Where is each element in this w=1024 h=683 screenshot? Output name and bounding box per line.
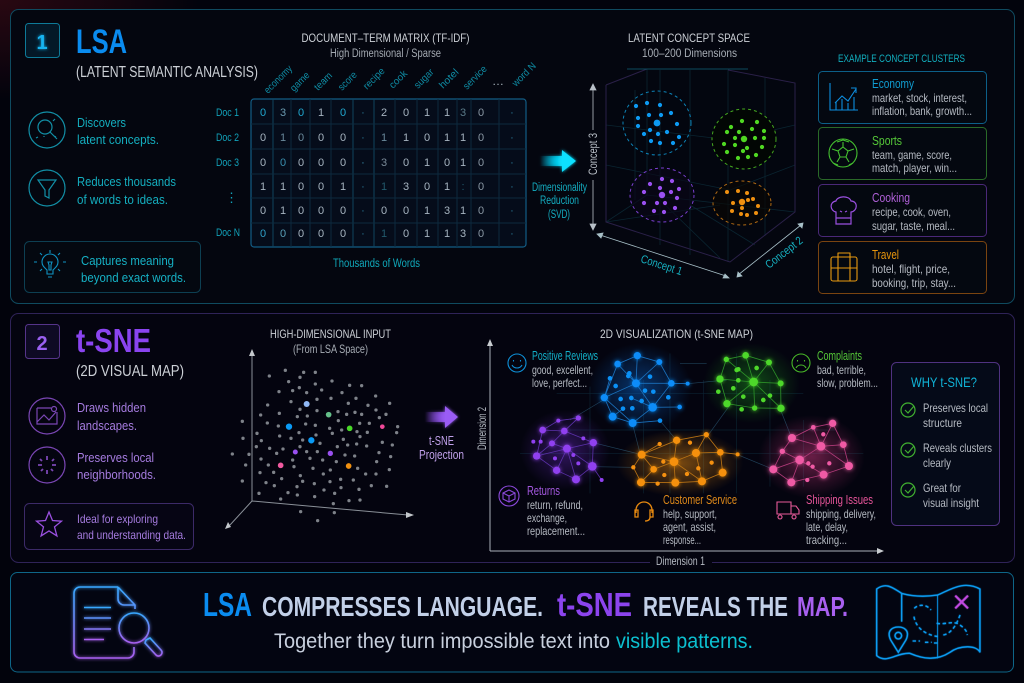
icon: soccer ball bbox=[829, 139, 857, 167]
panel: t-SNE bbox=[10, 314, 1014, 568]
arrow: dimensionality reduction bbox=[540, 150, 576, 172]
badge: number 1 bbox=[26, 24, 60, 58]
card: economy bbox=[818, 72, 986, 124]
matrix column labels: service bbox=[461, 64, 490, 92]
text: draws hidden landscapes bbox=[77, 400, 146, 433]
label: complaints: bad, terrible, bbox=[817, 363, 866, 377]
text: sports terms: team, game, score, bbox=[872, 148, 952, 162]
cluster: complaints nodes bbox=[703, 343, 800, 423]
cluster: positive reviews nodes bbox=[588, 343, 692, 433]
chart: document-term matrix: 0 0 000 · 1 0113 0 · bbox=[260, 228, 514, 240]
chart axes: Dimension 1 bbox=[656, 554, 705, 568]
label: shipping issues: shipping, delivery, bbox=[806, 507, 876, 521]
icon: suitcase bbox=[831, 253, 857, 281]
headline: MAP. bbox=[797, 591, 848, 622]
text: preserves local neighborhoods: Preserves local bbox=[77, 450, 154, 465]
text: ideal for exploring bbox=[77, 512, 186, 542]
icon: star bbox=[36, 512, 62, 536]
label: returns: replacement... bbox=[527, 524, 585, 538]
text: sports terms bbox=[872, 148, 957, 175]
text: captures meaning beyond exact words bbox=[81, 253, 186, 285]
label: returns: exchange, bbox=[527, 511, 567, 525]
text: sports terms: match, player, win... bbox=[872, 161, 957, 175]
label: complaints bbox=[792, 349, 878, 390]
chart: 3D latent concept space bbox=[586, 69, 806, 278]
label: customer service: response... bbox=[663, 533, 701, 547]
text: travel: Travel bbox=[872, 247, 899, 262]
matrix column labels: cook bbox=[387, 68, 411, 91]
text: reduces thousands of words: Reduces thousands bbox=[77, 174, 176, 189]
card: why t-SNE bbox=[892, 362, 1000, 526]
tagline: visible patterns. bbox=[616, 630, 753, 653]
matrix column labels: team bbox=[312, 70, 335, 93]
label: returns: Returns bbox=[527, 484, 560, 498]
heading: high-dimensional input: HIGH-DIMENSIONAL INPUT bbox=[270, 327, 392, 341]
card: sports bbox=[818, 128, 986, 180]
matrix column labels: economy bbox=[262, 64, 295, 96]
text: draws hidden landscapes: landscapes. bbox=[77, 418, 137, 433]
chart: document-term matrix: 0 3 0 1 0 · 2011 3 0 · bbox=[260, 107, 514, 119]
label: positive reviews: good, excellent, bbox=[532, 363, 593, 377]
checklist text: Reveals clusters bbox=[923, 441, 992, 455]
matrix column labels: game bbox=[288, 70, 313, 94]
matrix column labels: hotel bbox=[437, 67, 461, 91]
icon: funnel bbox=[29, 170, 65, 206]
icon: truck bbox=[777, 502, 799, 519]
text: reduces thousands of words: of words to ideas. bbox=[77, 192, 168, 207]
icon: chef hat bbox=[831, 197, 856, 224]
subheading: high dimensional sparse: High Dimensional / Sparse bbox=[330, 48, 441, 60]
label: positive reviews: Positive Reviews bbox=[532, 349, 598, 363]
panel: takeaway banner bbox=[10, 572, 1014, 672]
text: travel terms: hotel, flight, price, bbox=[872, 262, 950, 276]
text: cooking: Cooking bbox=[872, 190, 910, 205]
matrix row labels: Doc 3 bbox=[216, 157, 239, 169]
icon: magnifier bbox=[29, 112, 65, 148]
headline: REVEALS THE bbox=[643, 591, 788, 622]
cluster: customer service nodes bbox=[617, 430, 743, 497]
badge: number 2 bbox=[26, 324, 60, 358]
icon: treasure map bbox=[877, 585, 980, 659]
text: captures meaning beyond exact words: beyond exact words. bbox=[81, 270, 186, 285]
chart: t-SNE map bbox=[475, 339, 884, 568]
label: dimensionality reduction svd: Reduction bbox=[540, 195, 579, 207]
heading: t-SNE: t-SNE bbox=[76, 322, 151, 359]
cluster: green bbox=[712, 109, 776, 169]
text: discovers latent concepts: latent concepts. bbox=[77, 132, 159, 147]
heading: latent concept space: LATENT CONCEPT SPACE bbox=[628, 31, 750, 45]
headline: COMPRESSES LANGUAGE. bbox=[262, 591, 543, 622]
label: shipping issues: Shipping Issues bbox=[806, 493, 873, 507]
heading: example concept clusters: EXAMPLE CONCEPT CLUSTERS bbox=[838, 53, 965, 65]
label: thousands of words: Thousands of Words bbox=[333, 258, 420, 270]
matrix row labels: Doc 2 bbox=[216, 132, 239, 144]
text: economy terms: market, stock, interest, bbox=[872, 91, 967, 105]
text: cooking terms: recipe, cook, oven, bbox=[872, 205, 951, 219]
text: reduces thousands of words bbox=[77, 174, 176, 207]
label: dimensionality reduction svd: (SVD) bbox=[548, 209, 570, 221]
checklist text: structure bbox=[923, 416, 962, 430]
icon: frown bbox=[792, 354, 810, 372]
text: economy terms bbox=[872, 91, 972, 118]
badge: number 2: 2 bbox=[36, 333, 48, 355]
chart: 3D scatter bbox=[225, 349, 414, 529]
heading: LSA: LSA bbox=[76, 23, 127, 61]
checklist text: clearly bbox=[923, 456, 951, 470]
axis: concept 3 bbox=[586, 84, 600, 230]
label: shipping issues bbox=[777, 493, 876, 547]
subheading: 100-200 dimensions: 100–200 Dimensions bbox=[642, 48, 737, 60]
text: draws hidden landscapes: Draws hidden bbox=[77, 400, 146, 415]
text: travel terms bbox=[872, 262, 956, 290]
text: preserves local neighborhoods: neighborhoods. bbox=[77, 467, 156, 482]
label: dimensionality reduction svd: Dimensionality bbox=[532, 182, 587, 194]
label: shipping issues: late, delay, bbox=[806, 520, 848, 534]
text: ideal for exploring: Ideal for exploring bbox=[77, 512, 158, 526]
tagline: Together they turn impossible text into bbox=[274, 630, 610, 653]
label: customer service: Customer Service bbox=[663, 493, 737, 507]
chart: document-term matrix bbox=[251, 99, 526, 247]
headline: t-SNE bbox=[557, 586, 632, 623]
axis: concept 3: Concept 3 bbox=[588, 133, 600, 175]
matrix column labels: sugar bbox=[412, 67, 437, 91]
heading: document-term matrix: DOCUMENT–TERM MATRIX (TF-IDF) bbox=[302, 31, 470, 45]
checklist icons bbox=[901, 403, 915, 497]
cluster: shipping issues nodes bbox=[758, 415, 865, 498]
text: travel terms: booking, trip, stay... bbox=[872, 276, 956, 290]
text: cooking terms: sugar, taste, meal... bbox=[872, 219, 955, 233]
text: preserves local neighborhoods bbox=[77, 450, 156, 482]
checklist text: Preserves local bbox=[923, 401, 988, 415]
chart: document-term matrix: 0 0 000 · 3 0101 0 · bbox=[260, 157, 514, 169]
matrix row labels bbox=[216, 107, 240, 239]
cluster: blue bbox=[623, 91, 691, 155]
headline: LSA bbox=[203, 586, 252, 623]
label: complaints: slow, problem... bbox=[817, 376, 878, 390]
text: sports: Sports bbox=[872, 133, 902, 148]
icon: box bbox=[499, 486, 519, 506]
matrix column labels: recipe bbox=[361, 66, 388, 92]
label: customer service: agent, assist, bbox=[663, 520, 716, 534]
chart: document-term matrix: 0 1 0 00 · 1 1011 0 · bbox=[260, 132, 514, 144]
arrow: t-SNE projection bbox=[425, 406, 458, 428]
icon: smile bbox=[508, 354, 526, 372]
label: dimensionality reduction svd bbox=[532, 182, 587, 221]
label: customer service bbox=[635, 493, 737, 547]
label: complaints: Complaints bbox=[817, 349, 862, 363]
label: t-SNE projection: t-SNE bbox=[429, 434, 454, 448]
card: cooking bbox=[818, 184, 986, 236]
label: returns: return, refund, bbox=[527, 498, 583, 512]
label: t-SNE projection: Projection bbox=[419, 448, 464, 462]
text: economy terms: inflation, bank, growth... bbox=[872, 104, 972, 118]
callout: ideal for exploring bbox=[24, 504, 194, 550]
matrix column labels: score bbox=[336, 70, 360, 93]
text: discovers latent concepts: Discovers bbox=[77, 115, 126, 130]
cluster: orange bbox=[713, 181, 771, 225]
axis: concept 2 bbox=[737, 223, 806, 277]
icon: landscape bbox=[29, 398, 65, 434]
subheading: latent semantic analysis: (LATENT SEMANTIC ANALYSIS) bbox=[76, 64, 258, 81]
label: positive reviews bbox=[508, 349, 598, 390]
axis: concept 2: Concept 2 bbox=[763, 235, 806, 271]
matrix row labels: ⋮ bbox=[225, 190, 238, 205]
matrix row labels: Doc N bbox=[216, 227, 240, 239]
subheading: from LSA space: (From LSA Space) bbox=[293, 342, 368, 356]
heading: 2D visualization: 2D VISUALIZATION (t-SNE MAP) bbox=[600, 327, 753, 341]
headline bbox=[203, 586, 848, 623]
label: shipping issues: tracking... bbox=[806, 533, 847, 547]
chart: document-term matrix: 01000 · 00131 0 · bbox=[260, 205, 514, 217]
text: economy: Economy bbox=[872, 76, 914, 91]
heading: why t-SNE: WHY t-SNE? bbox=[911, 374, 977, 390]
checklist text bbox=[923, 401, 992, 510]
icon: light bulb bbox=[34, 250, 66, 277]
cluster: returns nodes bbox=[520, 410, 610, 490]
axis: concept 1 bbox=[597, 233, 729, 278]
text: ideal for exploring: and understanding data. bbox=[77, 528, 186, 542]
chart axes bbox=[475, 339, 884, 568]
icon: neighborhoods bbox=[29, 447, 65, 483]
text: discovers latent concepts bbox=[77, 115, 159, 147]
axis: concept 1: Concept 1 bbox=[639, 253, 684, 278]
badge: number 1: 1 bbox=[36, 32, 48, 54]
text: cooking terms bbox=[872, 205, 955, 233]
matrix column labels: … bbox=[492, 74, 504, 88]
checklist text: Great for bbox=[923, 481, 961, 495]
chart axes: Dimension 2 bbox=[475, 407, 489, 450]
checklist text: visual insight bbox=[923, 496, 980, 510]
card: travel bbox=[818, 242, 986, 294]
label: positive reviews: love, perfect... bbox=[532, 376, 587, 390]
matrix column labels bbox=[262, 61, 539, 96]
chart: document-term matrix: 11001 · 1 301 : 0 · bbox=[260, 181, 514, 193]
icon: headset bbox=[635, 502, 653, 521]
label: t-SNE projection bbox=[419, 434, 464, 462]
icon: document with magnifier bbox=[74, 587, 162, 658]
cluster: purple bbox=[630, 168, 694, 222]
label: returns bbox=[499, 484, 585, 538]
matrix column labels: word N bbox=[510, 61, 539, 90]
label: customer service: help, support, bbox=[663, 507, 717, 521]
subheading: 2D visual map: (2D VISUAL MAP) bbox=[76, 363, 184, 380]
text: captures meaning beyond exact words: Captures meaning bbox=[81, 253, 174, 268]
matrix row labels: Doc 1 bbox=[216, 107, 239, 119]
panel: LSA bbox=[10, 10, 1014, 304]
callout: captures meaning bbox=[24, 242, 200, 292]
icon: growth chart bbox=[830, 83, 858, 110]
